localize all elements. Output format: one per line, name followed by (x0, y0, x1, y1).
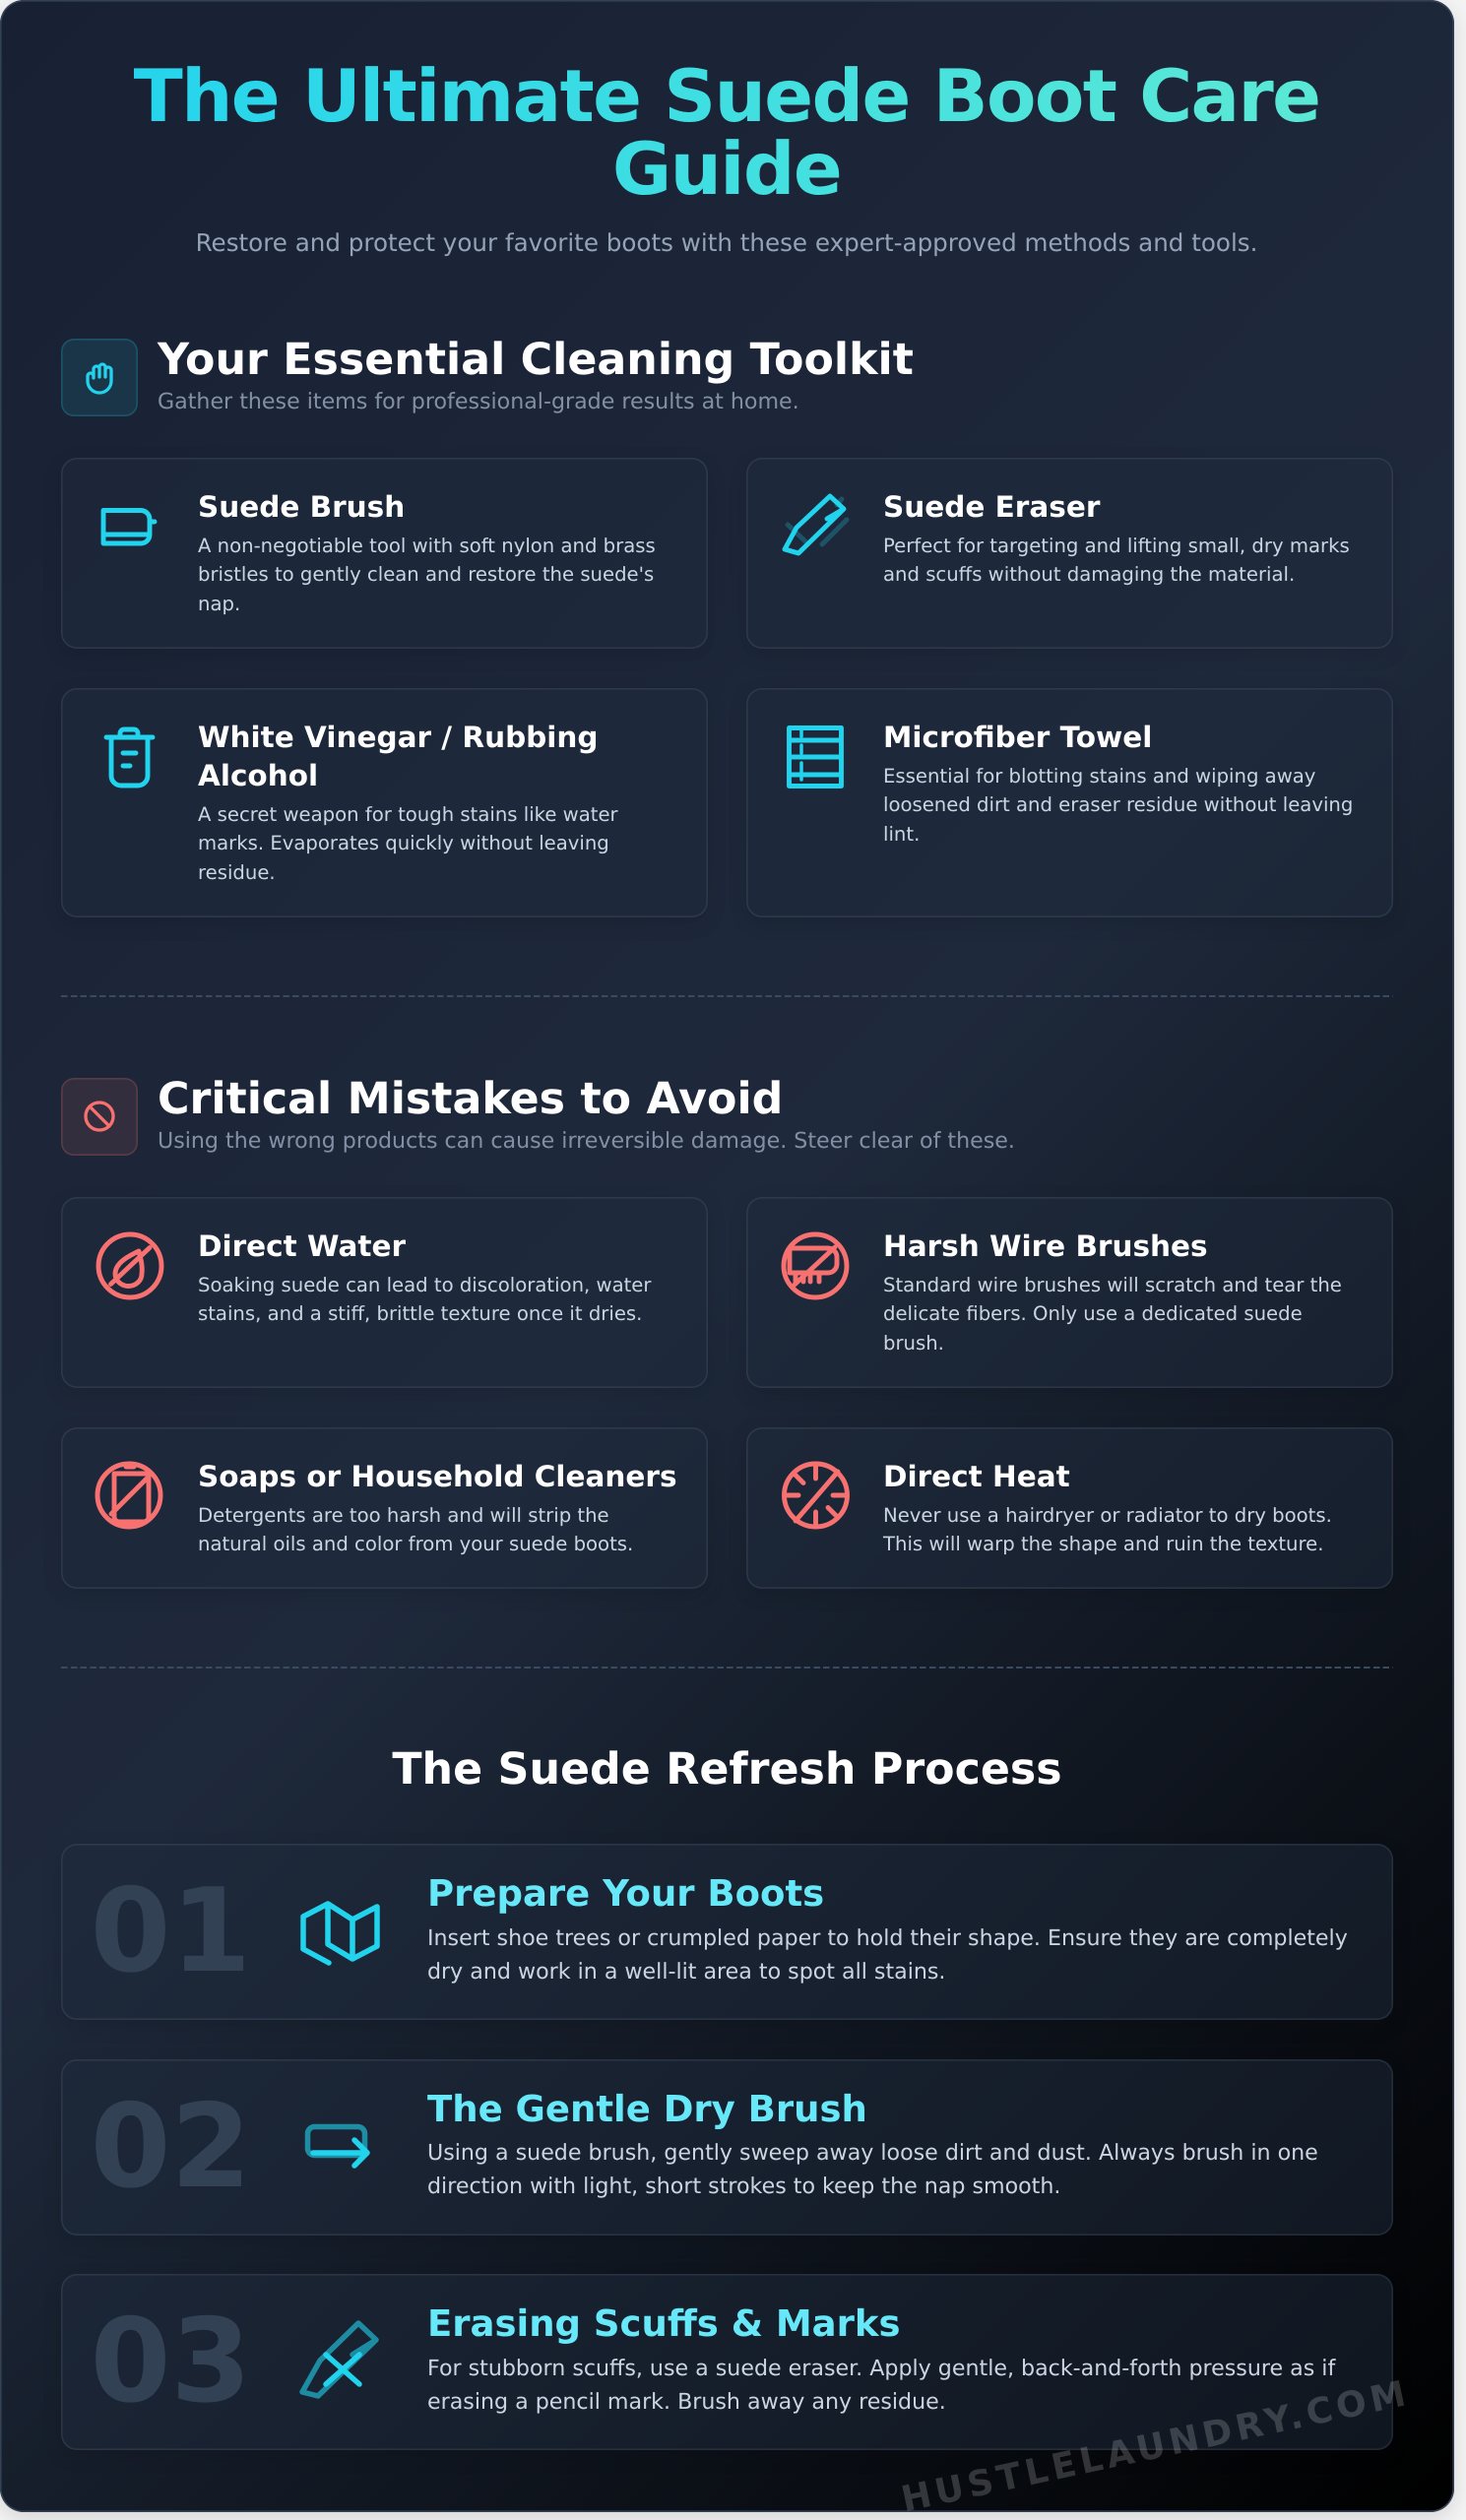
icon: towel (787, 725, 844, 788)
card title: Microfiber Towel (883, 721, 1152, 754)
step text: erasing a pencil mark. Brush away any residue. (427, 2389, 946, 2415)
icon: map (300, 1901, 380, 1966)
card text: Soaking suede can lead to discoloration, water (198, 1274, 651, 1295)
card text: marks. Evaporates quickly without leaving (198, 832, 609, 854)
step text (427, 1925, 1348, 1984)
step text (427, 2140, 1318, 2199)
card text: A secret weapon for tough stains like water (198, 803, 618, 825)
section heading: mistakes (61, 1073, 1015, 1156)
heading text: Critical Mistakes to Avoid (158, 1073, 783, 1124)
card text: nap. (198, 593, 240, 615)
heading description: Gather these items for professional-grade results at home. (158, 389, 799, 414)
section heading: process: The Suede Refresh Process (392, 1744, 1062, 1795)
card text (883, 1274, 1342, 1354)
icon: ban (61, 1078, 138, 1156)
card title: Soaps or Household Cleaners (198, 1460, 677, 1493)
step text (427, 2356, 1336, 2415)
icon: eraser (782, 493, 849, 555)
icon: hand (61, 339, 138, 416)
step number: 01 (91, 1863, 251, 1998)
icon: no water (96, 1232, 163, 1299)
step text: direction with light, short strokes to keep the nap smooth. (427, 2174, 1060, 2199)
card text: loosened dirt and eraser residue without leaving (883, 793, 1353, 816)
section: essential cleaning toolkit (61, 335, 1393, 917)
icon: bottle (104, 726, 156, 788)
step title: The Gentle Dry Brush (427, 2088, 867, 2130)
card text: natural oils and color from your suede boots. (198, 1533, 633, 1555)
title (61, 61, 1392, 207)
section: critical mistakes (61, 1073, 1393, 1589)
icon: no wire brush (782, 1232, 849, 1299)
card title: Direct Heat (883, 1460, 1070, 1493)
card: direct water (61, 1197, 708, 1388)
step text: Insert shoe trees or crumpled paper to hold their shape. Ensure they are completely (427, 1925, 1348, 1951)
card text: brush. (883, 1332, 944, 1354)
card text: residue. (198, 861, 276, 884)
card text (883, 534, 1350, 586)
card text: Detergents are too harsh and will strip the (198, 1504, 609, 1526)
card text (198, 1274, 652, 1325)
card: vinegar or alcohol (61, 688, 708, 917)
card text (198, 534, 656, 615)
card title: White Vinegar / Rubbing (198, 721, 599, 754)
card title: Direct Water (198, 1229, 406, 1263)
card: soaps (61, 1427, 708, 1589)
card text: A non-negotiable tool with soft nylon and brass (198, 534, 656, 557)
step number: 02 (91, 2079, 251, 2214)
step text: dry and work in a well-lit area to spot all stains. (427, 1959, 945, 1984)
step text: For stubborn scuffs, use a suede eraser. Apply gentle, back-and-forth pressure as if (427, 2356, 1335, 2381)
card text: Never use a hairdryer or radiator to dry boots. (883, 1504, 1332, 1526)
card text (198, 803, 618, 884)
card text: and scuffs without damaging the material. (883, 563, 1295, 586)
step 2 (61, 2059, 1393, 2235)
card: microfiber towel (746, 688, 1393, 917)
step 1 (61, 1844, 1393, 2020)
section heading: toolkit (61, 335, 914, 416)
card text (882, 1504, 1332, 1555)
title: Guide (612, 128, 841, 212)
card text: This will warp the shape and ruin the texture. (883, 1533, 1323, 1555)
card title: Harsh Wire Brushes (883, 1229, 1208, 1263)
heading description: Using the wrong products can cause irreversible damage. Steer clear of these. (158, 1128, 1015, 1154)
card: harsh wire brushes (746, 1197, 1393, 1388)
card: suede eraser (746, 458, 1393, 649)
card text: delicate fibers. Only use a dedicated suede (883, 1302, 1303, 1325)
step 3 (61, 2274, 1393, 2450)
section: refresh process (61, 1744, 1393, 2450)
card text: Perfect for targeting and lifting small, dry marks (883, 534, 1350, 557)
card text: bristles to gently clean and restore the suede's (198, 563, 654, 586)
card: suede brush (61, 458, 708, 649)
card text: lint. (883, 823, 920, 846)
icon: no heat (782, 1461, 850, 1530)
card title: Suede Eraser (883, 490, 1100, 524)
card title (198, 721, 599, 792)
icon: brush (100, 508, 158, 545)
card text: Essential for blotting stains and wiping away (883, 764, 1315, 788)
card text: Standard wire brushes will scratch and tear the (883, 1274, 1342, 1295)
icon: eraser with cross (299, 2320, 379, 2399)
step text: Using a suede brush, gently sweep away loose dirt and dust. Always brush in one (427, 2140, 1318, 2166)
icon: brush with arrow (305, 2124, 370, 2169)
step title: Prepare Your Boots (427, 1872, 824, 1915)
heading text: Your Essential Cleaning Toolkit (158, 335, 914, 384)
card title: Suede Brush (198, 490, 405, 524)
title: The Ultimate Suede Boot Care (134, 55, 1319, 139)
card text: stains, and a stiff, brittle texture once it dries. (198, 1302, 642, 1325)
step number: 03 (91, 2294, 251, 2428)
icon: no soap (95, 1461, 163, 1530)
card: direct heat (746, 1427, 1393, 1589)
subtitle: Restore and protect your favorite boots with these expert-approved methods and tools. (196, 228, 1257, 257)
card text (883, 764, 1353, 846)
card text (198, 1504, 633, 1555)
step title: Erasing Scuffs & Marks (427, 2302, 901, 2345)
card title: Alcohol (198, 759, 318, 792)
